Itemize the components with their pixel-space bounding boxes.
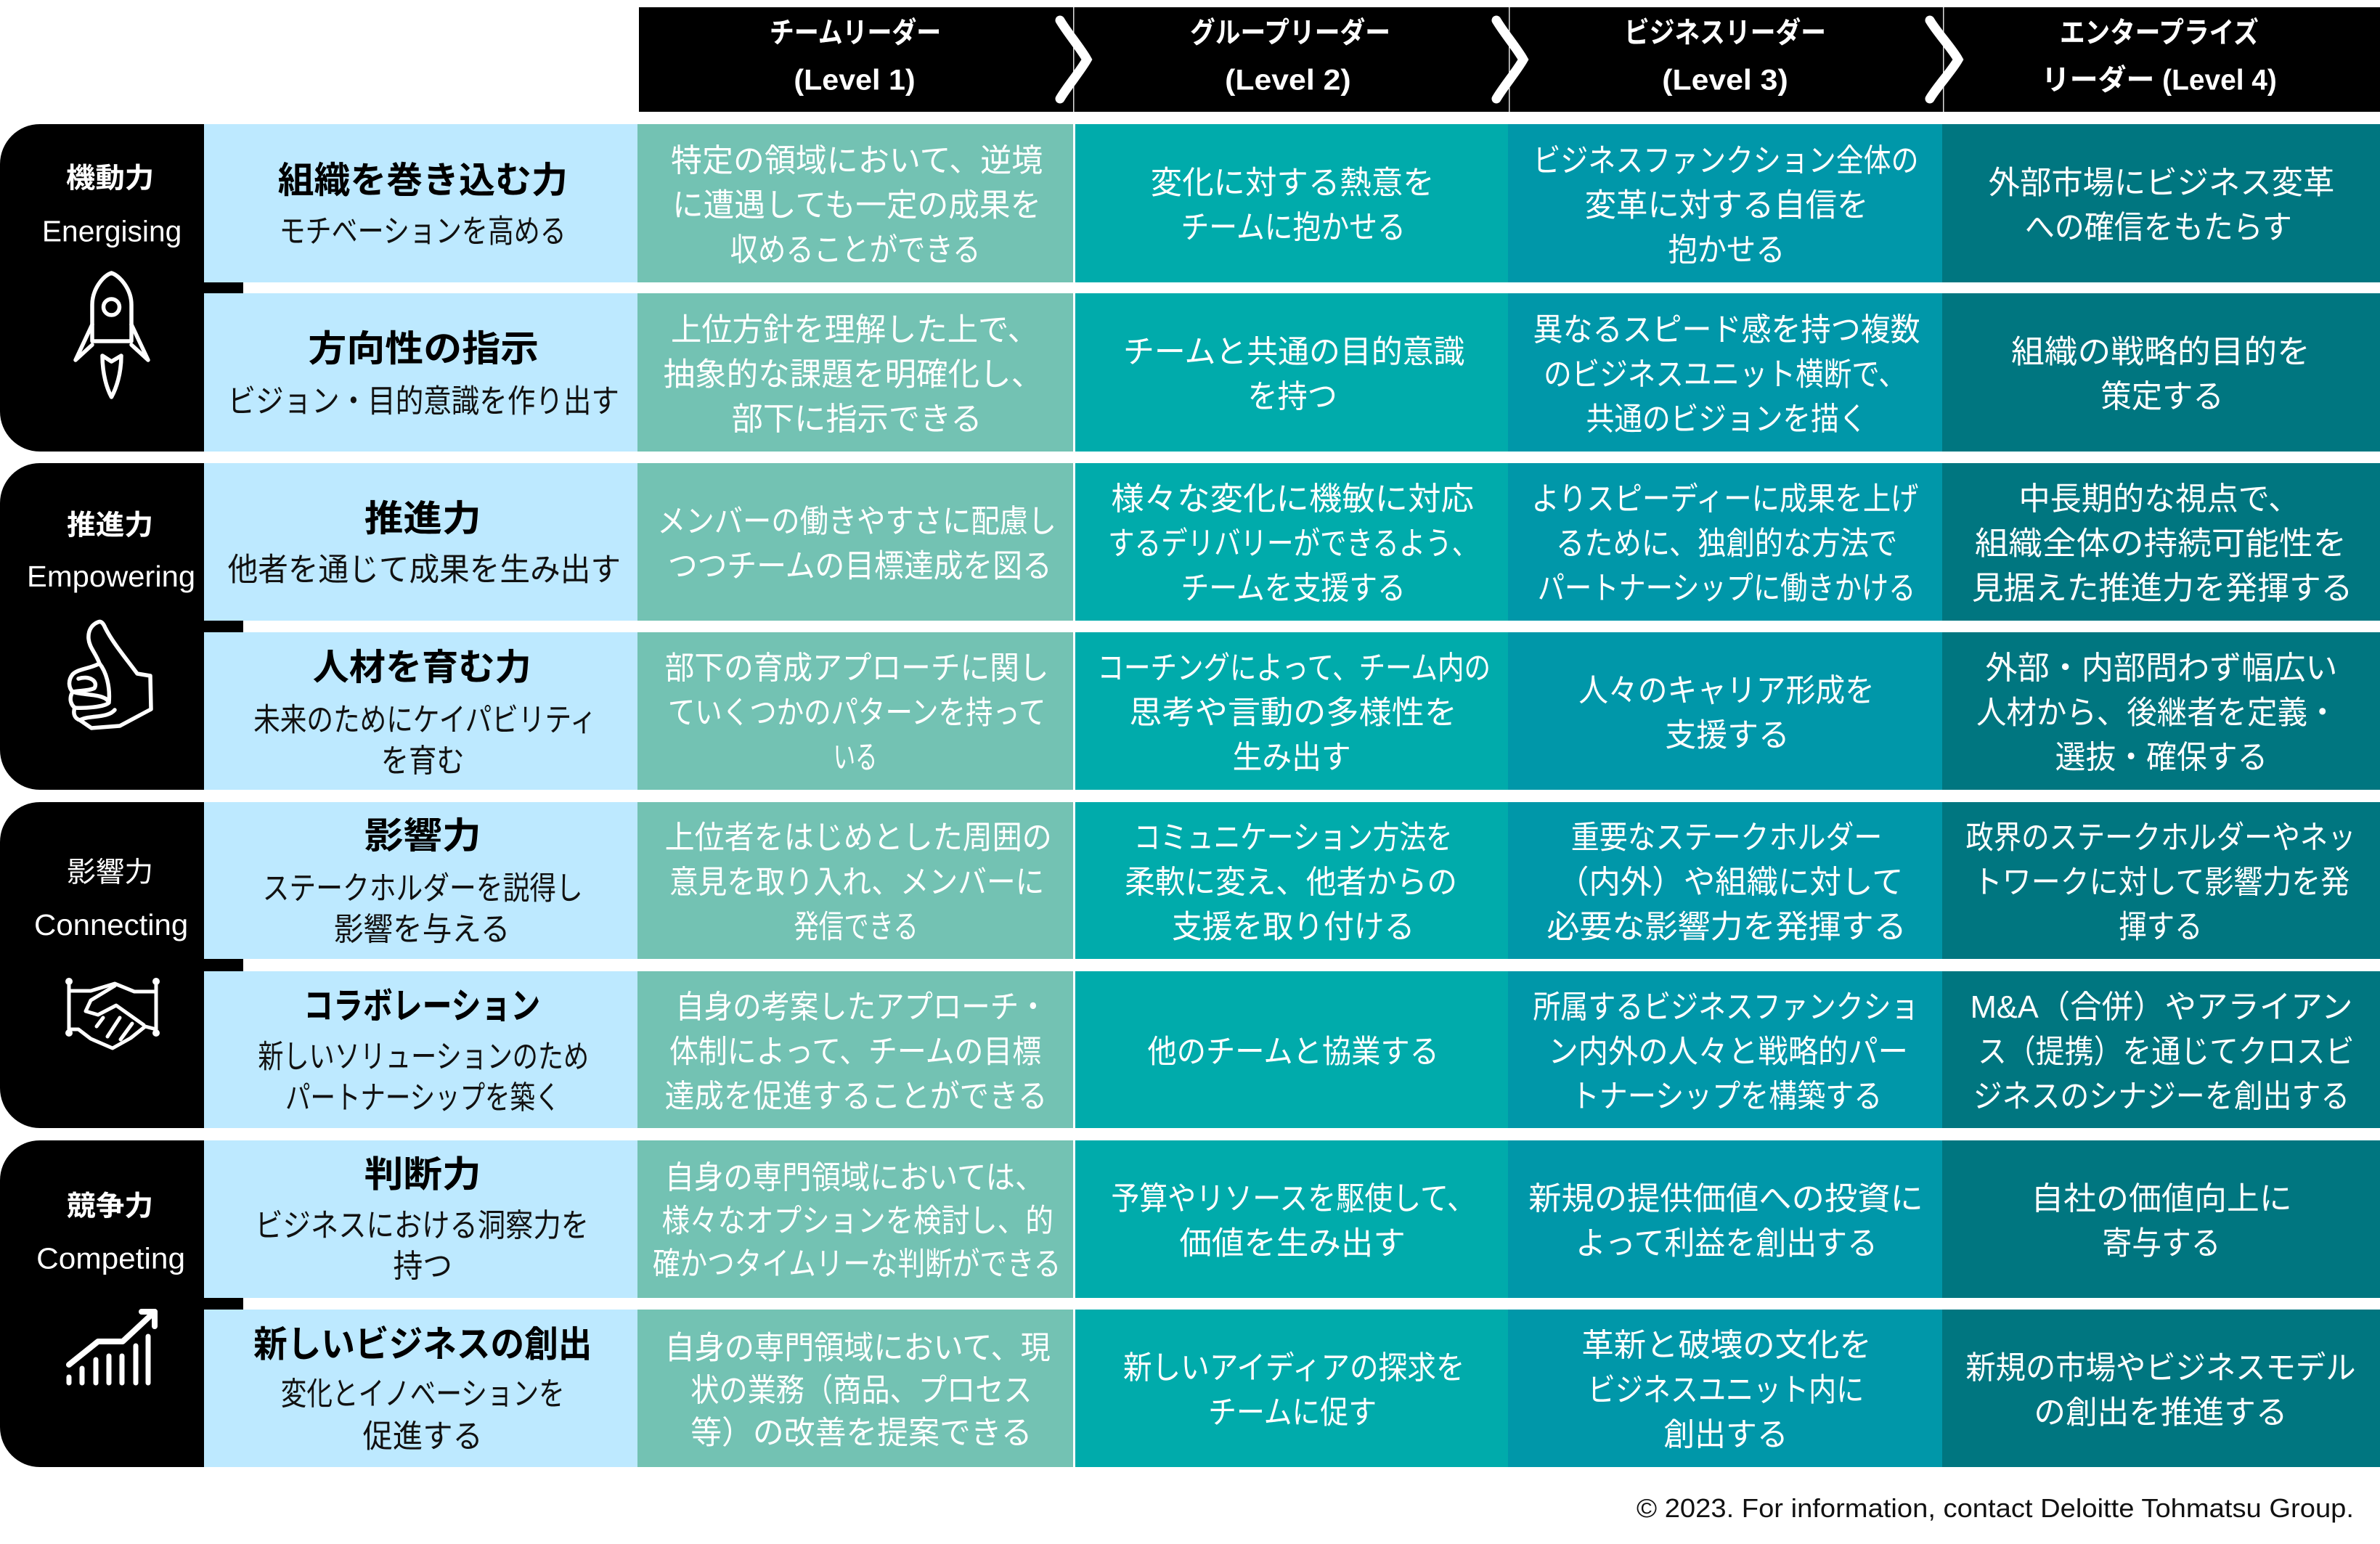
icon: growth chart: [69, 1312, 155, 1383]
level 2 text: チームに抱かせる: [1181, 210, 1406, 245]
level 2 text: [1111, 1181, 1475, 1261]
header label: level 4: エンタープライズ: [2060, 17, 2259, 49]
level 2 text: 支援を取り付ける: [1172, 909, 1414, 944]
level 1 text: 確かつタイムリーな判断ができる: [653, 1246, 1061, 1282]
category label: 機動力: [66, 163, 154, 194]
competency name: 新しいソリューションのため: [258, 1039, 589, 1075]
level 1 text: 体制によって、チームの目標: [669, 1034, 1041, 1069]
competency name: 影響を与える: [334, 912, 510, 947]
level 2 text: を持つ: [1247, 379, 1337, 414]
level 2 text: 柔軟に変え、他者からの: [1125, 865, 1457, 900]
level 2 text: [1108, 481, 1478, 606]
level 3 text: のビジネスユニット横断で、: [1544, 356, 1907, 392]
header label: level 2: グループリーダー: [1190, 17, 1390, 49]
category label: Empowering: [27, 560, 195, 593]
panel: 競争力 Competing: [0, 1140, 2380, 1467]
competency name: 推進力: [364, 499, 481, 539]
level 2 text: 思考や言動の多様性を: [1129, 695, 1457, 731]
level 3 text: 革新と破壊の文化を: [1581, 1328, 1872, 1363]
competency name: 新しいビジネスの創出: [253, 1324, 592, 1365]
competency name: を育む: [381, 743, 465, 779]
row: 推進力: [204, 463, 2380, 621]
level 1 text: 特定の領域において、逆境: [671, 143, 1043, 179]
level 3 text: 異なるスピード感を持つ複数: [1533, 312, 1920, 348]
level 1 text: 部下の育成アプローチに関し: [665, 650, 1049, 686]
level 1 text: 発信できる: [794, 909, 918, 944]
level 4 text: 寄与する: [2102, 1225, 2221, 1261]
level 2 text: するデリバリーができるよう、: [1108, 526, 1478, 562]
level 4 text: 自社の価値向上に: [2031, 1181, 2292, 1217]
competency name: [253, 1324, 592, 1454]
header label: level 1: (Level 1): [794, 64, 916, 96]
panel: 影響力 Connecting: [0, 802, 2380, 1128]
level 4 text: 策定する: [2100, 379, 2224, 414]
level 3 text: よりスピーディーに成果を上げ: [1531, 481, 1919, 517]
level 1 text: 抽象的な課題を明確化し、: [664, 356, 1043, 392]
header: leadership levels: [639, 7, 2380, 112]
competency name: 判断力: [364, 1154, 481, 1195]
level 1 text: 自身の専門領域において、現: [665, 1331, 1051, 1366]
level 1 text: 上位方針を理解した上で、: [671, 312, 1038, 348]
category label: 影響力: [67, 857, 153, 889]
row: 人材を育む力: [204, 632, 2380, 790]
level 3 text: [1533, 312, 1920, 437]
level 3 text: 共通のビジョンを描く: [1586, 401, 1867, 437]
level 3 text: パートナーシップに働きかける: [1538, 571, 1915, 606]
competency name: 他者を通じて成果を生み出す: [228, 552, 621, 588]
level 1 text: 部下に指示できる: [732, 401, 982, 437]
competency name: パートナーシップを築く: [285, 1080, 560, 1116]
level 2 text: [1123, 1350, 1464, 1430]
level 4 text: [1965, 1350, 2356, 1430]
competency name: 人材を育む力: [313, 648, 531, 688]
level 4 text: 中長期的な視点で、: [2018, 481, 2299, 517]
level 1 text: 収めることができる: [730, 232, 981, 268]
level 2 text: [1151, 166, 1435, 245]
level 4 text: 揮する: [2119, 909, 2202, 944]
level 3 text: [1578, 673, 1875, 753]
level 3 text: [1533, 143, 1919, 268]
level 2 text: コミュニケーション方法を: [1134, 820, 1453, 855]
level 4 text: 組織の戦略的目的を: [2011, 335, 2310, 370]
level 1 text: いる: [834, 740, 877, 775]
competency name: [278, 160, 568, 249]
panel: 推進力 Empowering: [0, 463, 2380, 790]
level 3 text: [1546, 820, 1907, 944]
competency name: 影響力: [364, 816, 481, 857]
category label: [42, 163, 182, 248]
level 2 text: 変化に対する熱意を: [1151, 166, 1435, 201]
competency name: ビジネスにおける洞察力を: [255, 1208, 589, 1243]
level 4 text: 新規の市場やビジネスモデル: [1965, 1350, 2356, 1386]
level 3 text: トナーシップを構築する: [1571, 1079, 1882, 1114]
competency name: [258, 986, 589, 1116]
level 3 text: 変革に対する自信を: [1585, 187, 1869, 223]
level 2 text: 価値を生み出す: [1179, 1225, 1406, 1261]
level 2 text: [1123, 335, 1464, 414]
level 1 text: 状の業務（商品、プロセス: [690, 1373, 1032, 1408]
level 4 text: [1972, 481, 2352, 606]
competency name: [255, 1154, 589, 1284]
level 4 text: [1976, 650, 2338, 775]
level 4 text: [2031, 1181, 2292, 1261]
competency name: モチベーションを高める: [280, 213, 566, 249]
level 3 text: 支援する: [1665, 717, 1790, 753]
competency name: 持つ: [393, 1249, 452, 1284]
level 3 text: [1528, 1181, 1923, 1261]
level 4 text: [2011, 335, 2310, 414]
row: 組織を巻き込む力: [204, 124, 2380, 282]
level 4 text: M&A（合併）やアライアン: [1971, 989, 2352, 1025]
level 3 text: 重要なステークホルダー: [1571, 820, 1882, 855]
level 1 text: [664, 312, 1043, 437]
header label: level 4: [2042, 17, 2277, 96]
level 4 text: 外部・内部問わず幅広い: [1986, 650, 2338, 686]
category label: 推進力: [67, 510, 153, 542]
level 2 text: [1098, 650, 1491, 775]
level 2 text: 様々な変化に機敏に対応: [1111, 481, 1474, 517]
level 1 text: 様々なオプションを検討し、的: [662, 1204, 1054, 1239]
category label: 競争力: [67, 1191, 153, 1222]
category block: [0, 124, 243, 452]
row: 影響力: [204, 802, 2380, 959]
category label: [36, 1191, 185, 1275]
level 2 text: チームを支援する: [1181, 571, 1406, 606]
level 1 text: [653, 1160, 1061, 1282]
row: コラボレーション: [204, 971, 2380, 1128]
level 4 text: [1965, 820, 2356, 944]
arrow: level 1 to 2: [1060, 20, 1087, 99]
arrow: level 2 to 3: [1496, 20, 1523, 99]
level 1 text: ていくつかのパターンを持って: [668, 695, 1046, 731]
competency name: [253, 648, 597, 779]
level 4 text: [1989, 166, 2334, 245]
level 1 text: [665, 650, 1049, 775]
level 3 text: 抱かせる: [1668, 232, 1785, 268]
level 2 text: 他のチームと協業する: [1147, 1034, 1439, 1069]
header label: level 2: (Level 2): [1225, 64, 1351, 96]
level 4 text: ス（提携）を通じてクロスビ: [1978, 1034, 2355, 1069]
header label: level 3: [1624, 17, 1826, 96]
level 4 text: [1971, 989, 2355, 1114]
arrow: level 3 to 4: [1930, 20, 1958, 99]
level 3 text: 必要な影響力を発揮する: [1546, 909, 1907, 944]
level 1 text: [657, 504, 1056, 584]
category label: Energising: [42, 214, 182, 248]
icon: thumbs up: [69, 621, 151, 728]
level 3 text: ビジネスファンクション全体の: [1533, 143, 1919, 179]
row: 新しいビジネスの創出: [204, 1310, 2380, 1467]
competency name: [228, 499, 621, 588]
competency name: 未来のためにケイパビリティ: [253, 703, 597, 738]
category label: Competing: [36, 1242, 185, 1275]
level 1 text: 等）の改善を提案できる: [690, 1416, 1032, 1451]
level 3 text: 創出する: [1663, 1417, 1788, 1453]
level 1 text: 自身の専門領域においては、: [665, 1160, 1044, 1196]
category block: [0, 1140, 243, 1467]
level 3 text: [1581, 1328, 1872, 1453]
header label: level 1: [770, 17, 941, 96]
competency name: 方向性の指示: [308, 329, 539, 369]
footer: copyright: © 2023. For information, contact Deloitte Tohmatsu Group.: [1637, 1493, 2354, 1523]
header label: level 1: チームリーダー: [770, 17, 941, 49]
competency name: 促進する: [363, 1418, 483, 1454]
level 4 text: 外部市場にビジネス変革: [1989, 166, 2334, 201]
competency name: コラボレーション: [303, 986, 540, 1026]
header label: level 4: リーダー (Level 4): [2042, 64, 2277, 96]
category block: [0, 802, 243, 1128]
category block: [0, 463, 243, 790]
competency name: ビジョン・目的意識を作り出す: [228, 384, 619, 420]
category label: Connecting: [34, 908, 188, 941]
header label: level 3: (Level 3): [1662, 64, 1788, 96]
level 4 text: 選抜・確保する: [2055, 740, 2267, 775]
level 3 text: （内外）や組織に対して: [1557, 865, 1904, 900]
level 2 text: コーチングによって、チーム内の: [1098, 650, 1491, 686]
level 1 text: [665, 820, 1052, 944]
level 1 text: に遭遇しても一定の成果を: [672, 187, 1041, 223]
level 2 text: チームと共通の目的意識: [1123, 335, 1464, 370]
row: 方向性の指示: [204, 293, 2380, 452]
category label: [34, 857, 188, 941]
header label: level 2: [1190, 17, 1390, 96]
level 1 text: つつチームの目標達成を図る: [668, 548, 1052, 584]
level 3 text: 人々のキャリア形成を: [1578, 673, 1875, 708]
competency name: [263, 816, 583, 947]
level 1 text: [665, 1331, 1051, 1451]
level 2 text: 生み出す: [1233, 740, 1351, 775]
level 4 text: の創出を推進する: [2034, 1394, 2288, 1430]
competency name: ステークホルダーを説得し: [263, 871, 583, 907]
competency name: 変化とイノベーションを: [281, 1376, 565, 1412]
icon: rocket: [76, 273, 148, 397]
row: 判断力: [204, 1140, 2380, 1298]
level 3 text: 所属するビジネスファンクショ: [1533, 989, 1919, 1025]
competency name: [228, 329, 619, 420]
level 3 text: ン内外の人々と戦略的パー: [1548, 1034, 1908, 1069]
level 1 text: 達成を促進することができる: [665, 1079, 1048, 1114]
level 4 text: 見据えた推進力を発揮する: [1972, 571, 2352, 606]
level 1 text: 自身の考案したアプローチ・: [675, 989, 1048, 1025]
icon: handshake: [67, 980, 158, 1048]
level 4 text: 人材から、後継者を定義・: [1976, 695, 2338, 731]
level 3 text: [1531, 481, 1919, 606]
level 3 text: ビジネスユニット内に: [1588, 1373, 1864, 1408]
level 2 text: [1125, 820, 1457, 944]
level 1 text: 上位者をはじめとした周囲の: [665, 820, 1052, 855]
level 3 text: よって利益を創出する: [1576, 1225, 1878, 1261]
level 3 text: るために、独創的な方法で: [1556, 526, 1897, 562]
competency name: 組織を巻き込む力: [278, 160, 568, 201]
category label: [27, 510, 195, 593]
level 2 text: 予算やリソースを駆使して、: [1111, 1181, 1475, 1217]
level 1 text: [671, 143, 1043, 268]
level 2 text: 新しいアイディアの探求を: [1123, 1350, 1464, 1386]
level 3 text: 新規の提供価値への投資に: [1528, 1181, 1923, 1217]
level 1 text: [665, 989, 1048, 1114]
level 4 text: 組織全体の持続可能性を: [1975, 526, 2347, 562]
level 2 text: チームに促す: [1208, 1394, 1377, 1430]
header label: level 3: ビジネスリーダー: [1624, 17, 1826, 49]
level 1 text: 意見を取り入れ、メンバーに: [669, 865, 1044, 900]
level 4 text: への確信をもたらす: [2025, 210, 2292, 245]
level 4 text: ジネスのシナジーを創出する: [1973, 1079, 2350, 1114]
level 1 text: メンバーの働きやすさに配慮し: [657, 504, 1056, 539]
level 4 text: トワークに対して影響力を発: [1973, 865, 2350, 900]
panel: 機動力 Energising: [0, 124, 2380, 452]
level 3 text: [1533, 989, 1919, 1114]
